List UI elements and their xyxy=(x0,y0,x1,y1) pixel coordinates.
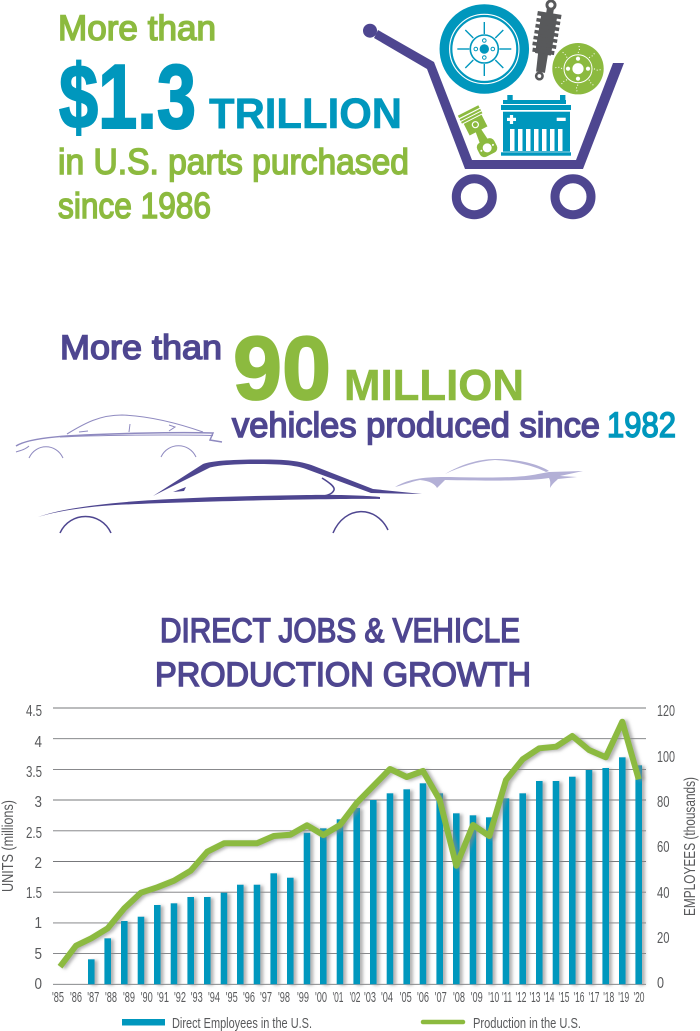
year labels: '90 xyxy=(141,990,153,1006)
year labels: '19 xyxy=(618,990,629,1006)
year labels: '91 xyxy=(157,990,169,1006)
year labels: '95 xyxy=(226,990,238,1006)
illustration: three car silhouettes xyxy=(16,415,583,533)
left axis labels: 1.5 xyxy=(26,885,42,902)
car: top left light outline xyxy=(16,415,222,458)
line: production xyxy=(60,722,639,967)
right axis labels: 40 xyxy=(657,885,670,902)
big number: $1.3: $1.3 xyxy=(59,47,196,148)
left axis labels: 2 xyxy=(34,855,42,872)
text: in U.S. parts purchased: in U.S. parts purchased xyxy=(58,141,409,182)
bars: direct employees xyxy=(88,757,642,984)
right axis labels: 100 xyxy=(657,749,675,766)
year labels: '18 xyxy=(603,990,614,1006)
year labels: '98 xyxy=(278,990,290,1006)
year labels: '20 xyxy=(634,990,644,1006)
right axis labels: 20 xyxy=(657,930,670,947)
big number: 90: 90 xyxy=(233,319,331,419)
title line 2: PRODUCTION GROWTH xyxy=(155,656,531,694)
title line 1: DIRECT JOBS & VEHICLE xyxy=(160,612,520,650)
left axis labels: 5 xyxy=(34,946,42,963)
right axis labels xyxy=(657,703,675,992)
text: 1982: 1982 xyxy=(607,406,676,445)
year labels: '12 xyxy=(516,990,526,1006)
text: vehicles produced since: vehicles produced since xyxy=(232,406,600,445)
year labels: '99 xyxy=(297,990,309,1006)
year labels: '01 xyxy=(332,990,344,1006)
chart title xyxy=(155,612,531,694)
icon: shopping cart with auto parts xyxy=(363,0,624,215)
text: since 1986: since 1986 xyxy=(58,185,211,226)
car: centre dark outline xyxy=(38,460,422,533)
left axis labels: 1 xyxy=(34,915,42,932)
year labels: '88 xyxy=(105,990,117,1006)
right axis labels: 120 xyxy=(657,703,675,720)
right axis labels: 60 xyxy=(657,839,670,856)
left axis labels: 0 xyxy=(34,976,42,993)
left axis labels: 4.5 xyxy=(26,703,42,720)
left axis labels: 4 xyxy=(34,734,42,751)
year labels: '16 xyxy=(574,990,584,1006)
year labels: '04 xyxy=(381,990,393,1006)
year labels: '02 xyxy=(350,990,360,1006)
left axis labels: 2.5 xyxy=(26,825,42,842)
text: more than: More than xyxy=(60,329,222,367)
text: trillion: TRILLION xyxy=(209,90,402,138)
legend: direct employees xyxy=(122,1016,312,1031)
text: more than: More than xyxy=(58,9,216,48)
year labels: '92 xyxy=(174,990,186,1006)
year labels: '05 xyxy=(400,990,412,1006)
year labels: '85 xyxy=(52,990,64,1006)
left axis title: UNITS (millions) xyxy=(0,800,17,892)
cart frame xyxy=(363,24,624,215)
year labels: '17 xyxy=(588,990,600,1006)
right axis labels: 0 xyxy=(657,975,664,992)
text: million: MILLION xyxy=(344,361,524,410)
combo chart: direct jobs and vehicle production xyxy=(0,703,699,1031)
year labels: '06 xyxy=(417,990,429,1006)
icon: piston xyxy=(458,105,501,160)
year labels: '08 xyxy=(453,990,465,1006)
right axis labels: 80 xyxy=(657,794,670,811)
year labels: '03 xyxy=(364,990,376,1006)
car: right pale outline xyxy=(395,459,583,488)
year labels: '15 xyxy=(558,990,570,1006)
year labels: '14 xyxy=(544,990,554,1006)
left axis labels: 3 xyxy=(34,794,42,811)
year labels: '96 xyxy=(243,990,255,1006)
icon: shock absorber xyxy=(527,0,564,82)
year labels xyxy=(52,990,644,1006)
year labels: '94 xyxy=(208,990,220,1006)
left axis labels: 3.5 xyxy=(26,764,42,781)
year labels: '93 xyxy=(191,990,203,1006)
year labels: '00 xyxy=(315,990,327,1006)
icon: tire xyxy=(444,9,524,89)
year labels: '11 xyxy=(502,990,512,1006)
heading: more than $1.3 trillion in parts xyxy=(58,9,409,226)
year labels: '86 xyxy=(70,990,82,1006)
year labels: '13 xyxy=(530,990,540,1006)
left axis labels xyxy=(26,703,42,993)
right axis title: EMPLOYEES (thousands) xyxy=(682,777,699,916)
year labels: '97 xyxy=(260,990,272,1006)
legend xyxy=(122,1016,581,1031)
icon: battery xyxy=(501,95,571,156)
year labels: '09 xyxy=(471,990,483,1006)
year labels: '89 xyxy=(123,990,135,1006)
year labels: '87 xyxy=(87,990,99,1006)
heading: more than 90 million vehicles xyxy=(60,319,676,445)
icon: brake disc xyxy=(552,43,604,94)
year labels: '07 xyxy=(435,990,447,1006)
year labels: '10 xyxy=(488,990,499,1006)
